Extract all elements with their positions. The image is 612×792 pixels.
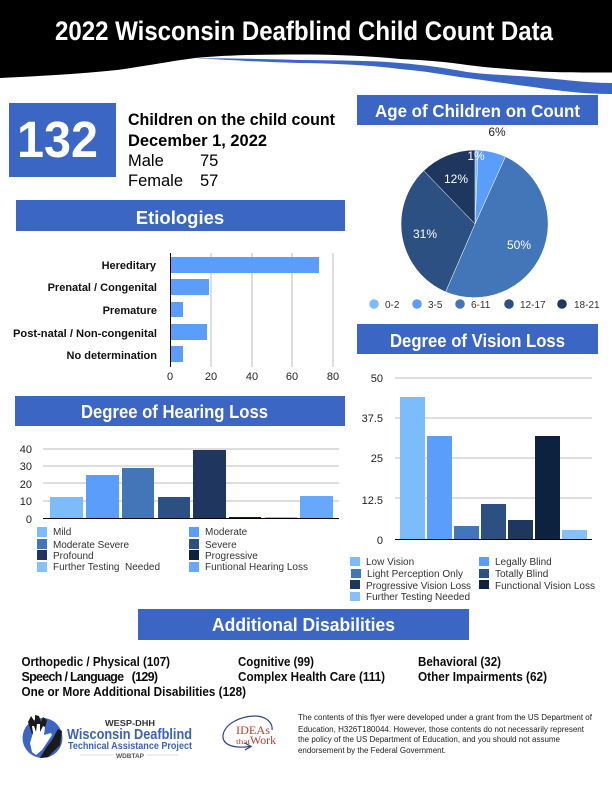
heading: degree of vision loss <box>357 324 598 354</box>
additional disabilities list: Complex Health Care (111) <box>238 670 385 684</box>
bar chart: hearing loss: 30 <box>20 461 32 473</box>
bar chart: etiologies: 20 <box>205 371 217 383</box>
bar chart: etiologies <box>13 253 339 383</box>
child count summary: 75 <box>200 152 218 170</box>
pie chart: age of children: 1% <box>467 149 485 163</box>
legend: vision loss: Further Testing Needed <box>366 592 470 603</box>
bar chart: vision loss: 37.5 <box>362 413 383 425</box>
logo: IDEAs that Work: IDEAs <box>236 723 270 737</box>
pie chart: age of children: 6% <box>488 125 506 139</box>
additional disabilities list <box>22 655 547 699</box>
logo: Wisconsin Deafblind Technical Assistance Project: WDBTAP <box>116 753 145 760</box>
logo: Wisconsin Deafblind Technical Assistance Project: Technical Assistance Project <box>68 741 193 752</box>
legend: vision loss <box>350 557 595 603</box>
heading: age of children on count <box>357 95 598 125</box>
legend: age groups: 12-17 <box>520 300 546 311</box>
funding disclaimer <box>298 713 593 755</box>
child count summary: 57 <box>200 172 218 190</box>
logo: Wisconsin Deafblind Technical Assistance Project: WESP-DHH <box>105 718 155 728</box>
legend: vision loss: Functional Vision Loss <box>495 581 595 592</box>
logo: IDEAs that Work <box>223 716 276 750</box>
child count summary <box>128 111 335 190</box>
additional disabilities list: Cognitive (99) <box>238 655 314 669</box>
funding disclaimer: the policy of the US Department of Education, and you should not assume <box>298 735 561 744</box>
logo: IDEAs that Work: that <box>236 737 251 746</box>
legend: hearing loss: Mild <box>53 527 71 538</box>
bar chart: etiologies: Prenatal / Congenital <box>48 282 157 294</box>
legend: age groups: 6-11 <box>471 300 491 311</box>
legend: vision loss: Legally Blind <box>495 557 552 568</box>
legend: vision loss: Low Vision <box>366 557 414 568</box>
heading: additional disabilities <box>138 609 469 640</box>
legend: vision loss: Progressive Vision Loss <box>366 581 471 592</box>
bar chart: hearing loss: 20 <box>20 479 32 491</box>
heading: etiologies <box>16 200 345 231</box>
legend: age groups <box>369 299 600 311</box>
heading: etiologies: Etiologies <box>136 207 224 228</box>
bar chart: vision loss: 12.5 <box>362 495 383 507</box>
legend: age groups: 18-21 <box>574 300 600 311</box>
heading: degree of vision loss: Degree of Vision Loss <box>390 331 565 351</box>
additional disabilities list: Other Impairments (62) <box>418 670 547 684</box>
legend: hearing loss: Moderate Severe <box>53 540 129 551</box>
bar chart: etiologies: 0 <box>167 371 173 383</box>
funding disclaimer: The contents of this flyer were developed under a grant from the US Department of <box>298 713 593 722</box>
child count summary: Male <box>128 152 164 170</box>
legend: vision loss: Light Perception Only <box>367 569 463 580</box>
legend: hearing loss: Severe <box>205 540 237 551</box>
bar chart: vision loss: 25 <box>371 453 383 465</box>
legend: hearing loss: Further Testing Needed <box>53 562 160 573</box>
legend: hearing loss: Profound <box>53 551 94 562</box>
title: 2022 Wisconsin Deafblind Child Count Data <box>55 16 553 46</box>
heading: additional disabilities: Additional Disabilities <box>212 615 395 635</box>
additional disabilities list: Behavioral (32) <box>418 655 501 669</box>
logo: Wisconsin Deafblind Technical Assistance Project: Wisconsin Deafblind <box>67 726 192 743</box>
legend: age groups: 0-2 <box>385 300 400 311</box>
bar chart: etiologies: Premature <box>103 305 157 317</box>
additional disabilities list: One or More Additional Disabilities (128) <box>22 685 246 699</box>
additional disabilities list: Orthopedic / Physical (107) <box>22 655 170 669</box>
logo: Wisconsin Deafblind Technical Assistance Project <box>22 715 193 760</box>
child count summary: December 1, 2022 <box>128 132 267 150</box>
heading: degree of hearing loss <box>15 396 345 426</box>
legend: vision loss: Totally Blind <box>495 569 548 580</box>
pie chart: age of children <box>401 125 548 298</box>
bar chart: vision loss <box>362 373 592 547</box>
heading: age of children on count: Age of Children on Count <box>375 101 580 121</box>
child count summary: Children on the child count <box>128 111 335 129</box>
bar chart: hearing loss: 10 <box>20 496 32 508</box>
pie chart: age of children: 12% <box>444 172 468 186</box>
logo: IDEAs that Work: Work <box>250 733 276 747</box>
funding disclaimer: endorsement by the Federal Government. <box>298 746 446 755</box>
bar chart: etiologies: 40 <box>246 371 258 383</box>
bar chart: etiologies: 80 <box>327 371 339 383</box>
legend: hearing loss: Progressive <box>205 551 258 562</box>
heading: degree of hearing loss: Degree of Hearing Loss <box>81 402 268 422</box>
legend: age groups: 3-5 <box>428 300 443 311</box>
bar chart: hearing loss <box>20 444 339 526</box>
header banner <box>0 0 612 94</box>
bar chart: etiologies: 60 <box>286 371 298 383</box>
bar chart: vision loss: 0 <box>377 535 383 547</box>
bar chart: vision loss: 50 <box>371 373 383 385</box>
bar chart: etiologies: Hereditary <box>102 260 157 272</box>
legend: hearing loss <box>37 527 308 573</box>
funding disclaimer: Education, H326T180044. However, those contents do not necessarily represent <box>298 725 585 734</box>
pie chart: age of children: 31% <box>413 227 437 241</box>
pie chart: age of children: 50% <box>507 238 531 252</box>
child count summary: Female <box>128 172 183 190</box>
legend: hearing loss: Moderate <box>205 527 248 538</box>
bar chart: hearing loss: 40 <box>20 444 32 456</box>
total count box <box>9 103 116 177</box>
bar chart: etiologies: No determination <box>67 350 157 362</box>
bar chart: etiologies: Post-natal / Non-congenital <box>13 328 157 340</box>
bar chart: hearing loss: 0 <box>26 514 32 526</box>
additional disabilities list: Speech / Language (129) <box>22 670 158 684</box>
total count box: 132 <box>17 111 98 168</box>
legend: hearing loss: Funtional Hearing Loss <box>205 562 308 573</box>
